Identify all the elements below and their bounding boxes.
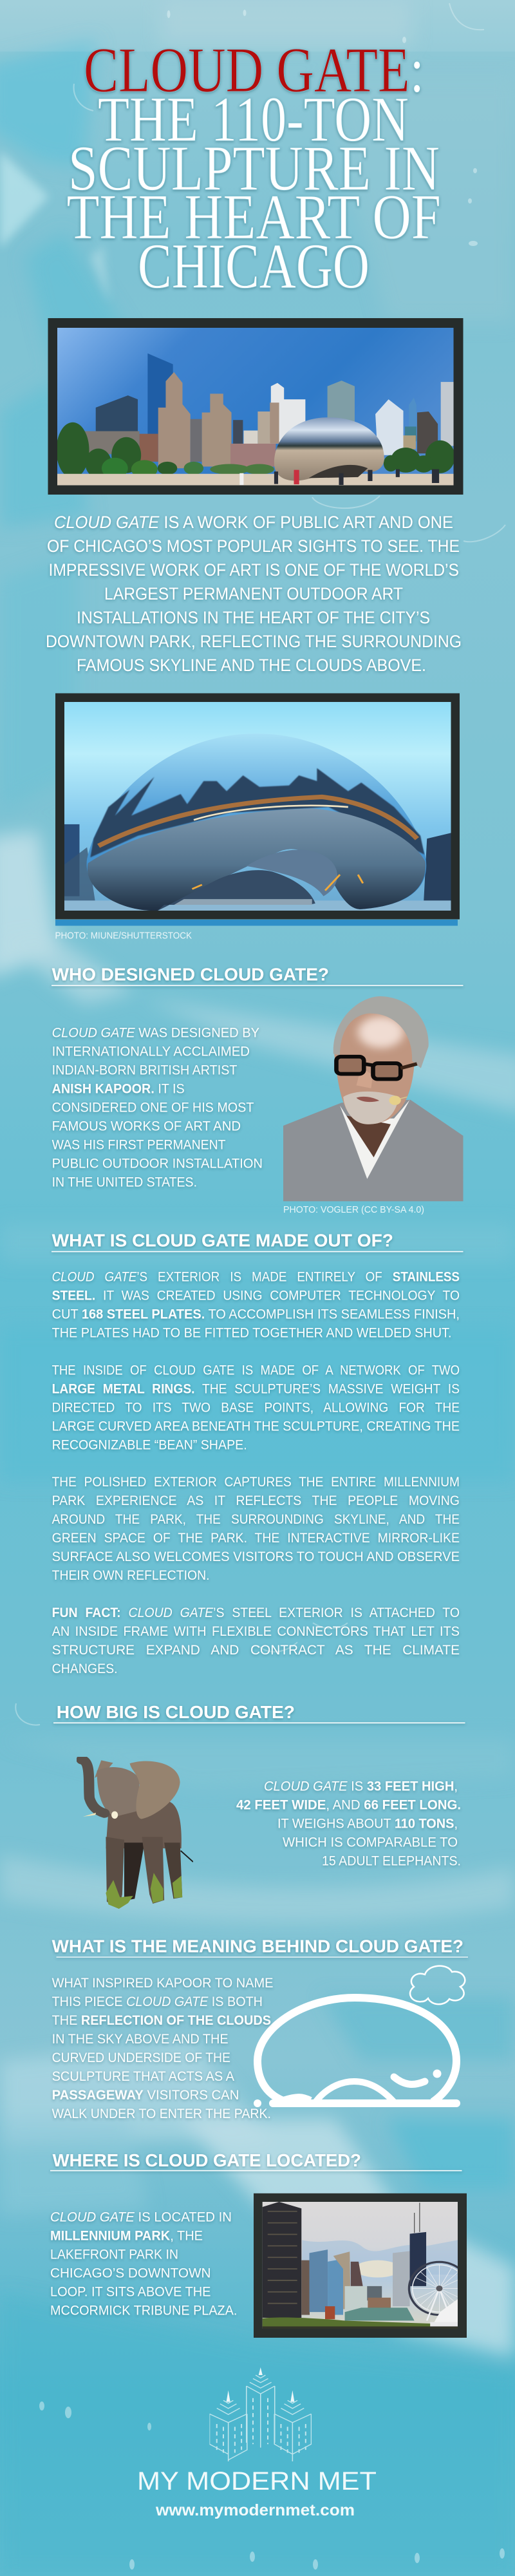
intro paragraph: OF CHICAGO’S MOST POPULAR SIGHTS TO SEE. THE (47, 536, 460, 556)
text: materials: DIRECTED TO ITS TWO BASE POINTS, ALLOWING FOR THE (52, 1400, 460, 1416)
text: materials: GREEN SPACE OF THE PARK. THE INTERACTIVE MIRROR-LIKE (52, 1531, 460, 1546)
text: materials: AROUND THE PARK, THE SURROUNDING SKYLINE, AND THE (52, 1512, 460, 1527)
text: who designed: CONSIDERED ONE OF HIS MOST (52, 1100, 254, 1115)
icon: cloud outline (410, 1966, 465, 2004)
text: who designed: PUBLIC OUTDOOR INSTALLATION (52, 1157, 263, 1171)
title: CLOUD GATE: (84, 34, 424, 106)
intro paragraph: FAMOUS SKYLINE AND THE CLOUDS ABOVE. (77, 656, 426, 675)
intro paragraph (46, 513, 462, 675)
website URL: www.mymodernmet.com (155, 2501, 355, 2519)
text: meaning: THIS PIECE CLOUD GATE IS BOTH (52, 1994, 263, 2009)
text: materials: PARK EXPERIENCE AS IT REFLECTS THE PEOPLE MOVING (52, 1493, 460, 1508)
text: materials (52, 1270, 460, 1676)
photo credit: Vogler: PHOTO: VOGLER (CC BY-SA 4.0) (283, 1204, 424, 1215)
section heading: location: WHERE IS CLOUD GATE LOCATED? (53, 2150, 361, 2170)
text: how big: 15 ADULT ELEPHANTS. (322, 1853, 461, 1869)
text: materials: LARGE CURVED AREA BENEATH THE SCULPTURE, CREATING THE (52, 1419, 460, 1434)
photo: Chicago lakefront with Ferris wheel (254, 2193, 469, 2338)
text: materials: AN INSIDE FRAME WITH FLEXIBLE CONNECTORS THAT LET ITS (52, 1624, 460, 1639)
text: meaning: WALK UNDER TO ENTER THE PARK. (52, 2107, 271, 2121)
text: who designed: ANISH KAPOOR. IT IS (52, 1082, 185, 1096)
text: materials: FUN FACT: CLOUD GATE’S STEEL EXTERIOR IS ATTACHED TO (52, 1605, 460, 1620)
text: how big: CLOUD GATE IS 33 FEET HIGH, (264, 1779, 458, 1794)
text: materials: STEEL. IT WAS CREATED USING COMPUTER TECHNOLOGY TO (52, 1288, 460, 1303)
text: location: MILLENNIUM PARK, THE (50, 2228, 203, 2244)
text: materials: CLOUD GATE’S EXTERIOR IS MADE ENTIRELY OF STAINLESS (52, 1270, 460, 1284)
text: meaning: WHAT INSPIRED KAPOOR TO NAME (52, 1976, 273, 1991)
title (67, 34, 441, 301)
section heading: who designed: WHO DESIGNED CLOUD GATE? (52, 965, 329, 984)
intro paragraph: DOWNTOWN PARK, REFLECTING THE SURROUNDING (46, 632, 462, 651)
logo wordmark: MY MODERN MET (137, 2467, 377, 2496)
text: location: LOOP. IT SITS ABOVE THE (50, 2285, 211, 2299)
text: how big: WHICH IS COMPARABLE TO (283, 1835, 458, 1850)
title: CHICAGO (138, 231, 370, 301)
text: who designed: WAS HIS FIRST PERMANENT (52, 1137, 226, 1153)
text: materials: THE POLISHED EXTERIOR CAPTURES THE ENTIRE MILLENNIUM (52, 1475, 460, 1490)
title: SCULPTURE IN (68, 133, 440, 204)
text: materials: THE PLATES HAD TO BE FITTED TOGETHER AND WELDED SHUT. (52, 1325, 452, 1341)
text: materials: CUT 168 STEEL PLATES. TO ACCOMPLISH ITS SEAMLESS FINISH, (52, 1307, 460, 1321)
text: location: MCCORMICK TRIBUNE PLAZA. (50, 2303, 237, 2318)
text: who designed: INTERNATIONALLY ACCLAIMED (52, 1045, 250, 1059)
title: THE HEART OF (67, 181, 441, 252)
icon: white outline of the bean (254, 1998, 456, 2107)
text: meaning: IN THE SKY ABOVE AND THE (52, 2032, 229, 2047)
text: how big: 42 FEET WIDE, AND 66 FEET LONG. (236, 1798, 461, 1812)
text: meaning: PASSAGEWAY VISITORS CAN (52, 2088, 239, 2103)
photo: Anish Kapoor portrait (283, 996, 464, 1202)
intro paragraph: LARGEST PERMANENT OUTDOOR ART (104, 584, 403, 603)
text: who designed: FAMOUS WORKS OF ART AND (52, 1119, 241, 1133)
text: meaning: SCULPTURE THAT ACTS AS A (52, 2069, 234, 2084)
text: materials: CHANGES. (52, 1662, 118, 1676)
section heading: how big: HOW BIG IS CLOUD GATE? (57, 1702, 295, 1722)
intro paragraph: IMPRESSIVE WORK OF ART IS ONE OF THE WORLD’S (49, 560, 459, 580)
intro paragraph: INSTALLATIONS IN THE HEART OF THE CITY’S (77, 608, 430, 627)
text: materials: THEIR OWN REFLECTION. (52, 1568, 209, 1583)
text: materials: SURFACE ALSO WELCOMES VISITORS TO TOUCH AND OBSERVE (52, 1549, 460, 1564)
text: meaning: THE REFLECTION OF THE CLOUDS (52, 2013, 271, 2028)
text: how big (236, 1779, 461, 1869)
section heading: what is it made of: WHAT IS CLOUD GATE MADE OUT OF? (52, 1230, 393, 1251)
logo: My Modern Met towers (210, 2367, 312, 2461)
photo: Cloud Gate panorama with Chicago skyline (48, 318, 464, 495)
text: materials: THE INSIDE OF CLOUD GATE IS MADE OF A NETWORK OF TWO (52, 1363, 460, 1378)
text: who designed (52, 1025, 263, 1190)
text: location (50, 2210, 237, 2318)
text: location: CLOUD GATE IS LOCATED IN (50, 2210, 232, 2224)
photo: Cloud Gate at dusk (55, 693, 460, 926)
title: THE 110-TON (98, 84, 409, 155)
text: materials: STRUCTURE EXPAND AND CONTRACT AS THE CLIMATE (52, 1643, 460, 1658)
text: how big: IT WEIGHS ABOUT 110 TONS, (277, 1816, 458, 1832)
image: elephant (77, 1757, 193, 1909)
text: who designed: CLOUD GATE WAS DESIGNED BY (52, 1025, 259, 1041)
text: location: LAKEFRONT PARK IN (50, 2248, 178, 2262)
text: materials: LARGE METAL RINGS. THE SCULPTURE’S MASSIVE WEIGHT IS (52, 1382, 460, 1396)
text: location: CHICAGO’S DOWNTOWN (50, 2266, 211, 2281)
text: meaning (52, 1976, 273, 2121)
section heading: meaning: WHAT IS THE MEANING BEHIND CLOUD GATE? (52, 1936, 464, 1956)
intro paragraph: CLOUD GATE IS A WORK OF PUBLIC ART AND ONE (54, 513, 453, 532)
photo credit: Miune: PHOTO: MIUNE/SHUTTERSTOCK (55, 930, 192, 942)
text: who designed: INDIAN-BORN BRITISH ARTIST (52, 1063, 238, 1078)
text: materials: RECOGNIZABLE “BEAN” SHAPE. (52, 1437, 247, 1453)
text: meaning: CURVED UNDERSIDE OF THE (52, 2050, 230, 2065)
text: who designed: IN THE UNITED STATES. (52, 1175, 197, 1190)
